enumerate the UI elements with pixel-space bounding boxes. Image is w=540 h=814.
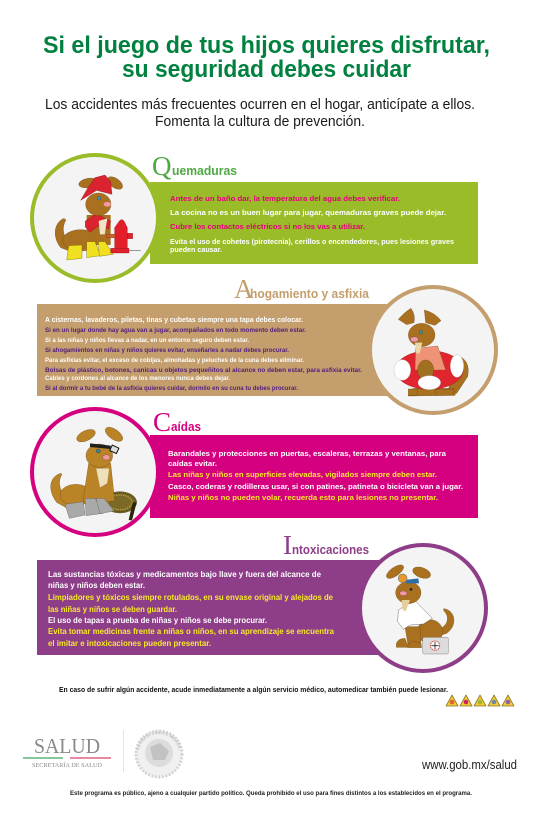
text block: ahogamiento tips: Bolsas de plástico, botones, canicas u objetos pequeñitos al alcance no deben estar, para asfixia evitar.	[45, 367, 362, 374]
text block: intoxicaciones tips: niñas y niños deben estar.	[48, 581, 145, 590]
text block: intoxicaciones tips	[48, 570, 335, 648]
heading: caídas: C	[153, 407, 171, 437]
subtitle text	[45, 97, 475, 130]
text block: quemaduras tips: Evita el uso de cohetes (pirotecnia), cerillos o encendedores, pues lesiones graves	[170, 237, 454, 246]
heading: quemaduras: Q	[152, 151, 172, 181]
icon: dog with helmet lamp and rope	[51, 425, 137, 520]
heading: ahogamiento y asfixia	[234, 274, 370, 304]
circle: quemaduras dog badge	[32, 155, 158, 281]
heading: intoxicaciones: ntoxicaciones	[292, 543, 369, 557]
title: Si el juego de tus hijos quieres disfrutar,	[43, 32, 490, 59]
band: ahogamiento	[37, 304, 397, 396]
text block: caídas tips: Las niñas y niños en superficies elevadas, vigilados siempre deben estar.	[168, 470, 437, 479]
icon: dog with life ring	[394, 308, 468, 396]
text block: ahogamiento tips: A cisternas, lavaderos, piletas, tinas y cubetas siempre una tapa debes colocar.	[45, 317, 303, 324]
logo: national seal	[134, 730, 184, 778]
title	[43, 32, 490, 83]
heading: intoxicaciones	[283, 530, 369, 560]
text block: intoxicaciones tips: Evita tomar medicinas frente a niñas o niños, en su aprendizaje se encuentra	[48, 627, 335, 636]
text block: caídas tips: Niñas y niños no pueden volar, recuerda esto para lesiones no presentar.	[168, 493, 438, 502]
heading: ahogamiento y asfixia: hogamiento y asfixia	[250, 287, 370, 301]
text block: quemaduras tips: Cubre los contactos eléctricos si no los vas a utilizar.	[170, 222, 365, 231]
subtitle text: Los accidentes más frecuentes ocurren en el hogar, anticípate a ellos.	[45, 97, 475, 113]
heading: caídas: aídas	[171, 420, 201, 434]
logo: Salud	[23, 734, 111, 769]
panel: ahogamiento y asfixia	[37, 274, 496, 413]
subtitle text: Fomenta la cultura de prevención.	[155, 114, 365, 130]
heading: caídas	[153, 407, 201, 437]
band: intoxicaciones	[37, 560, 387, 655]
circle: ahogamiento dog badge	[370, 287, 496, 413]
website url: www.gob.mx/salud	[421, 757, 517, 772]
heading: intoxicaciones: I	[283, 530, 292, 560]
text block: caídas tips: Barandales y protecciones en puertas, escaleras, terrazas y ventanas, para	[168, 449, 447, 458]
icon: doctor dog with first-aid kit	[384, 562, 454, 654]
text block: quemaduras tips: pueden causar.	[170, 245, 222, 254]
panel: caídas	[32, 407, 478, 535]
text block: quemaduras tips: La cocina no es un buen lugar para jugar, quemaduras graves puede dejar.	[170, 208, 446, 217]
text block: caídas tips	[168, 449, 463, 502]
text block: caídas tips: Casco, coderas y rodilleras usar, si con patines, patineta o bicicleta van a jugar.	[168, 482, 463, 491]
panel: intoxicaciones	[37, 530, 486, 671]
logo: Salud: SECRETARÍA DE SALUD	[32, 761, 103, 769]
text block: ahogamiento tips: Cables y cordones al alcance de los menores nunca debes dejar.	[45, 375, 230, 382]
text block: ahogamiento tips: Si al dormir a tu bebé de la asfixia quieres cuidar, dormilo en su cuna tu debes procurar.	[45, 385, 298, 392]
text block: intoxicaciones tips: el imitar e intoxicaciones pueden presentar.	[48, 639, 211, 648]
icons: five warning triangles	[446, 695, 514, 706]
heading: quemaduras	[152, 151, 237, 181]
text block: intoxicaciones tips: las niñas y niños se deben guardar.	[48, 605, 177, 614]
icon: firefighter dog with hydrant	[55, 174, 141, 260]
heading: ahogamiento y asfixia: A	[234, 274, 254, 304]
band: quemaduras	[150, 182, 478, 264]
text block: ahogamiento tips	[45, 317, 362, 392]
title: su seguridad debes cuidar	[122, 56, 411, 83]
circle: caídas dog badge	[32, 409, 158, 535]
text block: ahogamiento tips: Si a las niñas y niños llevas a nadar, en un entorno seguro deben estar.	[45, 337, 249, 344]
text block: ahogamiento tips: Si en un lugar donde hay agua van a jugar, acompáñados en todo momento deben estar.	[45, 327, 306, 334]
heading: quemaduras: uemaduras	[172, 164, 237, 178]
band: caídas	[150, 435, 478, 518]
text block: intoxicaciones tips: Limpiadores y tóxicos siempre rotulados, en su envase original y alejados de	[48, 593, 334, 602]
text block: quemaduras tips	[170, 194, 454, 254]
text block: intoxicaciones tips: El uso de tapas a prueba de niñas y niños se debe procurar.	[48, 616, 267, 625]
text block: intoxicaciones tips: Las sustancias tóxicas y medicamentos bajo llave y fuera del alcance de	[48, 570, 322, 579]
logo: Salud: SALUD	[34, 734, 100, 758]
legal disclaimer: Este programa es público, ajeno a cualquier partido político. Queda prohibido el uso para fines distintos a los establecidos en el programa.	[70, 790, 472, 797]
text block: quemaduras tips: Antes de un baño dar, la temperatura del agua debes verificar.	[170, 194, 400, 203]
circle: intoxicaciones dog badge	[360, 545, 486, 671]
text block: ahogamiento tips: Para asfixias evitar, el exceso de cobijas, almohadas y peluches de la cuna debes eliminar.	[45, 357, 304, 364]
warning note: En caso de sufrir algún accidente, acude inmediatamente a algún servicio médico, automedicar también puede lesionar.	[59, 687, 448, 694]
panel: quemaduras	[32, 151, 478, 281]
logo: national seal: ESTADOS UNIDOS MEXICANOS	[136, 732, 180, 750]
text block: ahogamiento tips: Si ahogamientos en niñas y niños quieres evitar, enseñarles a nadar debes procurar.	[45, 347, 289, 354]
text block: caídas tips: caídas evitar.	[168, 459, 217, 468]
